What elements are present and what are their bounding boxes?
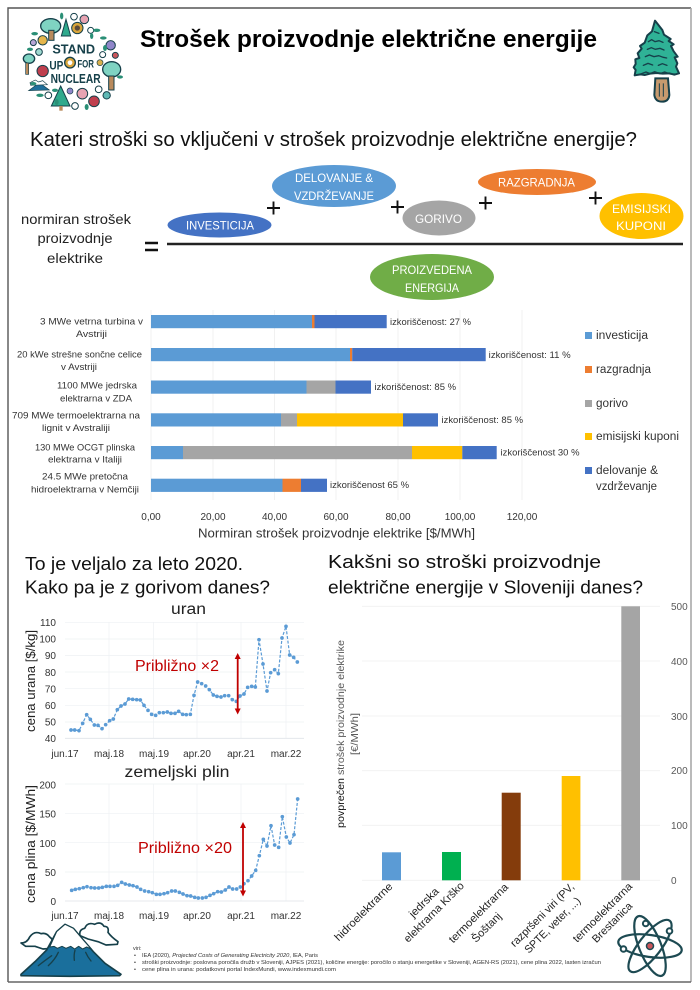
legend: emisijski kuponi [596,431,679,443]
category labels: 130 MWe OCGT plinska [35,442,136,454]
x axis ticks: mar.22 [271,911,302,922]
heading: which costs are included: Kateri stroški so vključeni v strošek proizvodnje električne energije? [30,129,637,151]
equals sign [145,243,158,250]
x axis ticks [50,749,302,760]
chart title: zemeljski plin: zemeljski plin [124,764,230,781]
ellipse: gorivo: GORIVO [415,212,462,226]
icon: mountain with clouds [21,923,121,976]
category labels: jedrska [406,885,442,921]
right axis ticks [671,602,688,887]
annotation: about times two: Približno ×2 [135,658,219,675]
category labels: Avstriji [76,329,107,340]
category labels: 20 kWe strešne sončne celice [17,350,142,360]
ellipse: delovanje in vzdrževanje: DELOVANJE & [295,171,373,185]
axis title: povprečen strošek proizvodnje elektrike [335,640,347,828]
gas data series [70,797,299,900]
y axis ticks: 40 [45,734,56,745]
x axis tick labels [141,512,538,523]
category labels: 3 MWe vetrna turbina v [40,316,143,328]
uranium data series [69,624,299,732]
right axis ticks: 300 [671,712,688,723]
icon: atom [617,912,683,980]
x axis ticks: maj.18 [94,911,124,922]
icon: pine tree [634,21,679,102]
capacity factor labels: izkoriščenost 30 % [500,448,580,458]
x axis ticks: apr.20 [183,911,211,922]
ellipse: proizvedena energija: PROIZVEDENA [392,263,472,277]
sources: IEA (2020), Projected Costs of Generating Electricity 2020 , IEA, Paris [142,953,318,959]
formula left-hand label: proizvodnje [38,231,112,246]
x axis ticks: mar.22 [271,749,302,760]
ellipse: investicija: INVESTICIJA [186,218,254,232]
line chart: uranium price [23,601,304,760]
y axis ticks: 50 [45,718,56,728]
x axis tick labels: 0,00 [141,512,161,523]
category labels [12,316,143,496]
category labels: razpršeni viri (PV, [508,881,577,950]
ellipse: delovanje in vzdrževanje [272,165,396,207]
sources: viri: [133,946,142,952]
capacity factor labels: izkoriščenost: 27 % [390,317,472,328]
logo lettering: UP [49,58,63,72]
category labels: elektrarna v Italiji [48,454,122,466]
column: nuclear Krško [442,852,461,880]
category labels: Šoštanj [469,910,504,945]
formula: normalised cost equation [21,165,684,300]
category labels [332,880,636,956]
y axis title: cena plina [$/MWh] [23,785,38,903]
legend: investicija [596,330,649,342]
capacity factor labels: izkoriščenost: 85 % [374,382,457,393]
x axis tick labels: 100,00 [445,512,476,523]
x axis ticks: apr.21 [227,911,255,922]
y axis ticks [39,618,56,745]
legend: delovanje & [596,465,658,477]
sources: stroški proizvodnje: poslovna poročila družb v Sloveniji, AJPES (2021), količine energije: poročilo o stanju energetike v Sloveniji, AGEN-RS (2021), cene plina 2022, lasten izračun [142,960,601,966]
logo lettering: FOR [77,59,94,71]
logo lettering [49,42,101,86]
bar: lignite Australia [151,413,438,426]
x axis tick labels: 120,00 [507,512,538,523]
capacity factor labels: izkoriščenost: 11 % [489,350,571,361]
legend: gorivo [596,398,628,410]
y axis ticks: 110 [40,618,56,629]
y axis ticks: 80 [45,668,56,679]
x axis ticks: apr.20 [183,749,211,760]
sources: • [134,960,136,966]
column: TEŠ [502,793,521,880]
column: distributed sources [562,776,580,880]
sources: • [134,967,136,973]
fraction line [167,243,683,245]
sources: cene plina in urana: podatkovni portal IndexMundi, www.indexmundi.com [142,967,336,973]
category labels: hidroelektrarne [332,881,395,944]
y axis ticks: 150 [39,810,56,820]
bar: solar rooftop [151,348,486,361]
formula left-hand label: normiran strošek [21,212,131,227]
arrow: uranium increase [235,653,241,714]
y axis ticks: 100 [39,839,56,850]
x axis ticks: maj.18 [94,749,124,760]
legend: razgradnja [596,364,652,376]
category labels: elektrarna Krško [402,880,467,945]
right axis ticks: 400 [671,657,688,668]
category labels: lignit v Avstraliji [42,423,110,434]
sources: • [134,953,136,959]
column: hydro [382,852,401,880]
x axis tick labels: 40,00 [262,512,287,523]
x axis tick labels: 20,00 [200,512,226,523]
category labels: hidroelektrarna v Nemčiji [31,484,139,496]
capacity factor labels: izkoriščenost 65 % [330,480,410,491]
heading: costs in Slovenia today: Kakšni so stroški proizvodnje [328,551,601,572]
x axis tick labels: 80,00 [385,512,411,523]
heading: costs in Slovenia today: električne energije v Sloveniji danes? [328,576,643,598]
arrow: gas increase [240,822,246,896]
ellipse: emisijski kuponi: EMISIJSKI [612,202,671,216]
ellipse: proizvedena energija: ENERGIJA [405,281,459,295]
y axis ticks: 70 [45,684,56,696]
right axis ticks: 100 [671,821,688,832]
y axis ticks: 90 [45,651,56,662]
x axis ticks: maj.19 [139,911,169,922]
bar: hydro Germany [151,479,327,492]
axis title: [€/MWh] [349,713,361,755]
sources [133,946,601,973]
x axis ticks: maj.19 [139,749,169,760]
heading: year 2020 and fuel today: Kako pa je z gorivom danes? [25,576,270,598]
category labels: SPTE, veter, ...) [522,895,583,956]
category labels: 1100 MWe jedrska [57,380,138,392]
formula left-hand label: elektrike [47,251,103,266]
bar: nuclear USA [151,380,371,394]
y axis ticks [39,780,56,908]
category labels: termoelektrarna [447,881,512,946]
logo lettering: STAND [52,42,95,57]
x axis ticks: jun.17 [50,911,79,922]
capacity factor labels: izkoriščenost: 85 % [442,415,524,426]
ellipse: emisijski kuponi [600,193,684,239]
heading: year 2020 and fuel today [25,553,270,598]
ellipse: razgradnja: RAZGRADNJA [498,176,575,190]
bar: wind turbine [151,315,387,328]
icon: stand up for nuclear logo [23,13,123,111]
category labels: v Avstriji [61,362,97,373]
ellipse: emisijski kuponi: KUPONI [616,219,666,233]
bar chart: normalised cost by plant [12,310,580,540]
axis title [335,640,361,828]
logo lettering: NUCLEAR [51,71,101,86]
annotation: about times twenty: Približno ×20 [138,840,232,857]
ellipse: razgradnja [478,169,596,195]
category labels: termoelektrarna [571,880,636,945]
formula left-hand label [21,212,131,266]
plus signs [267,192,602,214]
bar: OCGT gas Italy [151,446,497,459]
chart title: uran: uran [171,601,206,618]
x axis ticks: apr.21 [227,749,255,760]
y axis ticks: 60 [45,701,56,712]
y axis ticks: 50 [45,868,56,879]
right axis ticks: 500 [671,602,688,613]
capacity factor labels [330,317,580,491]
line chart: natural gas price [23,764,304,922]
ellipse: delovanje in vzdrževanje: VZDRŽEVANJE [294,188,374,203]
title: Strošek proizvodnje električne energije [140,26,597,53]
legend: vzdrževanje [596,481,657,493]
ellipse: proizvedena energija [370,254,494,300]
column: TE Brestanica [621,606,640,880]
y axis title: cena urana [$/kg] [23,630,38,732]
x axis tick labels: 60,00 [323,512,349,523]
category labels: Brestanica [590,900,636,946]
x axis ticks [50,911,302,922]
ellipse: investicija [168,212,272,238]
right axis ticks: 0 [671,876,677,887]
category labels: 709 MWe termoelektrarna na [12,410,141,422]
heading: year 2020 and fuel today: To je veljalo za leto 2020. [25,553,243,574]
legend [585,330,679,493]
y axis ticks: 100 [39,634,56,646]
y axis ticks: 200 [39,780,56,792]
ellipse: gorivo [402,200,476,236]
column chart: Slovenian generation cost [332,602,688,956]
heading: costs in Slovenia today [328,551,643,598]
x axis ticks: jun.17 [50,749,79,760]
x axis title: Normiran strošek proizvodnje elektrike [$/MWh] [198,526,475,540]
category labels: elektrarna v ZDA [60,394,133,404]
category labels: 24.5 MWe pretočna [42,472,129,482]
right axis ticks: 200 [671,766,688,777]
y axis ticks: 0 [50,897,56,908]
